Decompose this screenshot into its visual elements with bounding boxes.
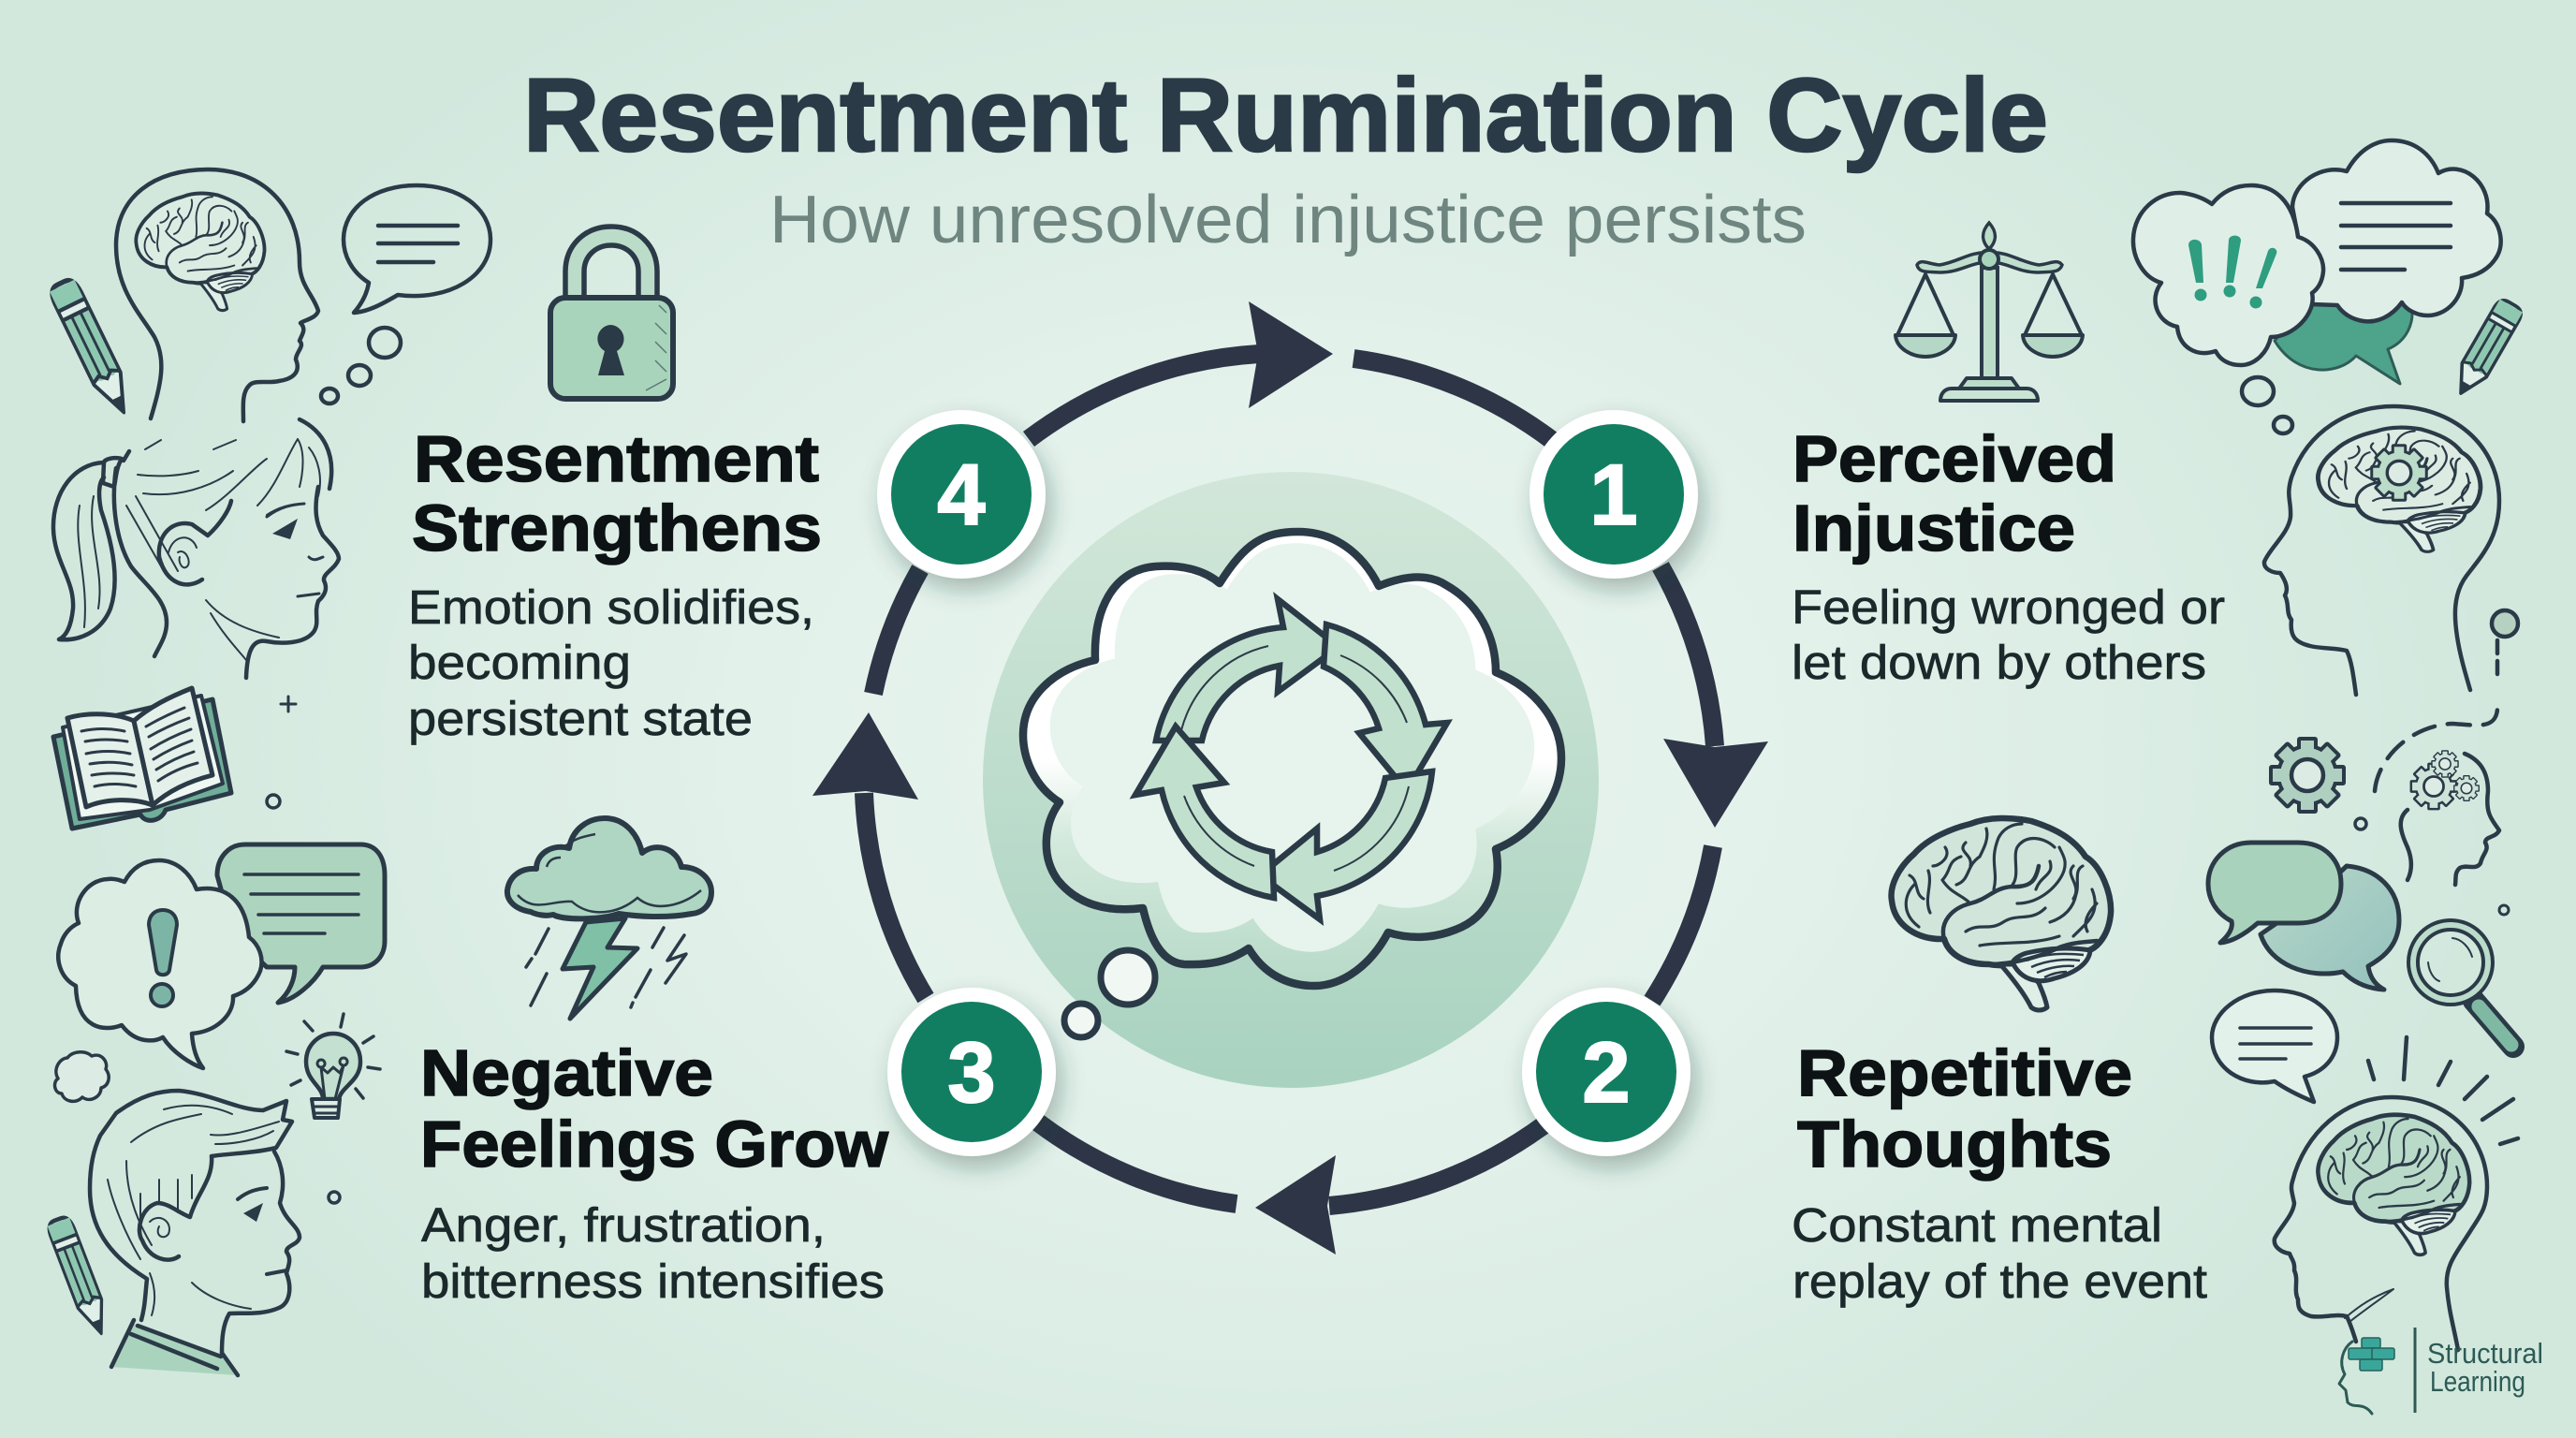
icon: light bulb: [286, 1014, 380, 1118]
small circle: [2355, 818, 2366, 829]
thought circles: [321, 328, 401, 404]
thought bubbles: [1064, 950, 1155, 1037]
logo bricks: [2349, 1338, 2394, 1371]
rays: [2368, 1037, 2518, 1144]
panel: step 1 perceived injustice: [1792, 223, 2225, 689]
cycle arrows icon: [1135, 599, 1447, 919]
step badge 3: [887, 988, 1056, 1156]
icon: open book: [53, 688, 231, 829]
icon: pencil: [46, 1215, 113, 1338]
subtitle: How unresolved injustice persists: [769, 183, 1807, 257]
icon: balance scales: [1895, 223, 2083, 401]
panel: step 4 resentment strengthens: persistent state: [408, 692, 753, 745]
panel: step 3 negative feelings grow: [420, 818, 889, 1308]
boy profile: [90, 1091, 300, 1375]
icon: pencil: [48, 277, 137, 418]
centre disc: [983, 472, 1599, 1088]
small circle: [329, 1192, 340, 1203]
head with brain: [116, 169, 318, 421]
heading: Perceived: [1793, 422, 2116, 495]
panel: step 2 repetitive thoughts: Thoughts: [1797, 1108, 2112, 1181]
description: Feeling wronged or: [1792, 580, 2225, 634]
speech bubble with lines: [2212, 990, 2337, 1102]
description: Emotion solidifies,: [408, 580, 814, 634]
step badge 3: 3: [947, 1025, 996, 1121]
cycle ring with arrows: [812, 301, 1768, 1255]
step badge 2: [1522, 988, 1690, 1156]
logo head: [2339, 1342, 2372, 1414]
step badge 4: [877, 410, 1046, 579]
small circle: [267, 795, 280, 808]
central motif: cloud with cycle arrows: [983, 472, 1599, 1088]
step badge 1: [1530, 410, 1698, 579]
plus mark: [281, 697, 296, 712]
icon: gear: [2269, 737, 2346, 814]
thought cloud: [1023, 532, 1561, 986]
logo wordmark: Learning: [2430, 1365, 2525, 1398]
cloud with exclamation marks: [2133, 185, 2323, 365]
cloud with text lines: [2292, 140, 2501, 321]
thought circles: [2242, 377, 2292, 433]
icon: storm cloud: [507, 818, 711, 1019]
blue speech bubble: [2261, 866, 2399, 990]
small head with gears: [2401, 750, 2499, 885]
panel: step 2 repetitive thoughts: replay of the event: [1793, 1255, 2207, 1308]
girl profile: [53, 419, 339, 678]
left illustrations: [46, 169, 490, 1375]
green speech bubble: [217, 844, 385, 1003]
right illustrations: [2133, 140, 2543, 1414]
logo: Structural Learning: [2339, 1328, 2543, 1414]
step badge 2: 2: [1582, 1025, 1631, 1121]
panel: step 1 perceived injustice: let down by others: [1792, 636, 2206, 689]
small circle: [2499, 905, 2509, 915]
description: Constant mental: [1792, 1198, 2162, 1252]
description: Anger, frustration,: [421, 1198, 826, 1252]
icon: magnifying glass: [2413, 925, 2513, 1047]
speech bubble: [344, 185, 490, 313]
panel: step 4 resentment strengthens: becoming: [408, 636, 631, 689]
panel: step 4 resentment strengthens: [408, 227, 822, 745]
heading: Resentment: [414, 422, 819, 495]
dark green speech bubble: [2275, 300, 2412, 384]
heading: Negative: [420, 1036, 713, 1109]
panel: step 1 perceived injustice: Injustice: [1793, 492, 2075, 565]
panel: step 3 negative feelings grow: Feelings Grow: [420, 1108, 889, 1181]
icon: pencil: [2449, 297, 2525, 401]
logo wordmark: Structural: [2427, 1337, 2543, 1370]
logo wordmark: [2427, 1337, 2543, 1398]
icon: padlock: [550, 227, 673, 399]
logo divider: [2413, 1328, 2417, 1413]
lollipop marker: [2492, 610, 2518, 678]
cloud with exclamation: [58, 860, 262, 1068]
panel: step 3 negative feelings grow: bitterness intensifies: [421, 1255, 885, 1308]
panel: step 2 repetitive thoughts: [1792, 818, 2207, 1308]
icon: brain: [1892, 818, 2111, 1010]
small cloud: [55, 1052, 109, 1101]
arrowheads: [812, 301, 1768, 1255]
head with gear brain: [2264, 406, 2499, 695]
panel: step 4 resentment strengthens: Strengthens: [412, 492, 822, 565]
head with brain: [2275, 1097, 2487, 1350]
green speech bubble: [2208, 843, 2341, 943]
ring arcs: [864, 354, 1715, 1206]
heading: Repetitive: [1797, 1036, 2132, 1109]
dashed arc: [2375, 702, 2497, 791]
step badge 4: 4: [937, 448, 986, 543]
title: Resentment Rumination Cycle: [523, 58, 2048, 173]
step badge 1: 1: [1589, 448, 1638, 543]
